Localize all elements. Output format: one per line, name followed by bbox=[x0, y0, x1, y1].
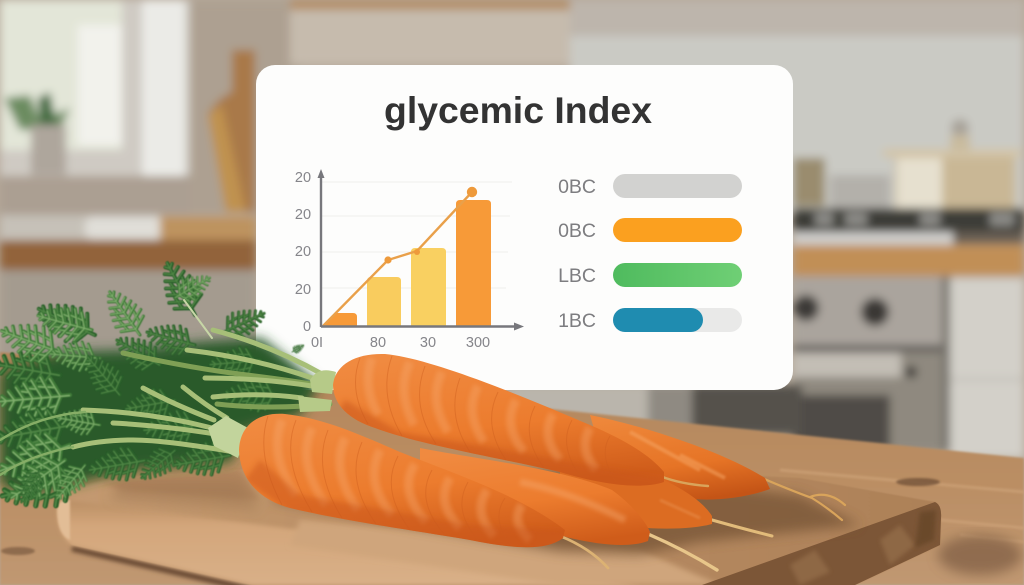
y axis labels: 20 bbox=[295, 244, 311, 260]
trend line bbox=[323, 187, 477, 326]
axes bbox=[318, 169, 524, 330]
bar and line chart bbox=[295, 169, 524, 351]
y axis labels: 20 bbox=[295, 170, 311, 186]
legend row 3: LBC bbox=[558, 265, 596, 287]
y axis labels: 20 bbox=[295, 282, 311, 298]
leaf fronds bbox=[0, 254, 306, 519]
lower middle carrot bbox=[420, 448, 717, 570]
dark foliage mass bbox=[0, 338, 320, 495]
legend row 3 bbox=[558, 263, 742, 287]
x axis labels bbox=[311, 335, 490, 351]
middle right carrot bbox=[560, 465, 772, 536]
legend row 1 bbox=[558, 174, 742, 198]
top carrot bbox=[333, 354, 708, 495]
back right carrot bbox=[590, 415, 845, 520]
carrot greens bbox=[0, 254, 336, 519]
bars bbox=[324, 200, 491, 326]
wooden table bbox=[0, 352, 1024, 585]
x axis labels: 300 bbox=[466, 335, 490, 351]
stems bbox=[0, 300, 336, 475]
y axis labels: 0 bbox=[303, 319, 311, 335]
legend row 2 bbox=[558, 218, 742, 242]
front carrot bbox=[239, 414, 608, 568]
title: glycemic Index bbox=[384, 90, 652, 131]
y axis labels: 20 bbox=[295, 207, 311, 223]
carrot shadows bbox=[110, 470, 860, 555]
x axis labels: 80 bbox=[370, 335, 386, 351]
legend row 2: 0BC bbox=[558, 220, 596, 242]
y axis labels bbox=[295, 170, 311, 335]
legend row 4: 1BC bbox=[558, 310, 596, 332]
x axis labels: 30 bbox=[420, 335, 436, 351]
x axis labels: 0I bbox=[311, 335, 323, 351]
legend row 1: 0BC bbox=[558, 176, 596, 198]
cutting board bbox=[57, 468, 941, 585]
legend row 4 bbox=[558, 308, 742, 332]
white chart panel bbox=[256, 65, 793, 390]
